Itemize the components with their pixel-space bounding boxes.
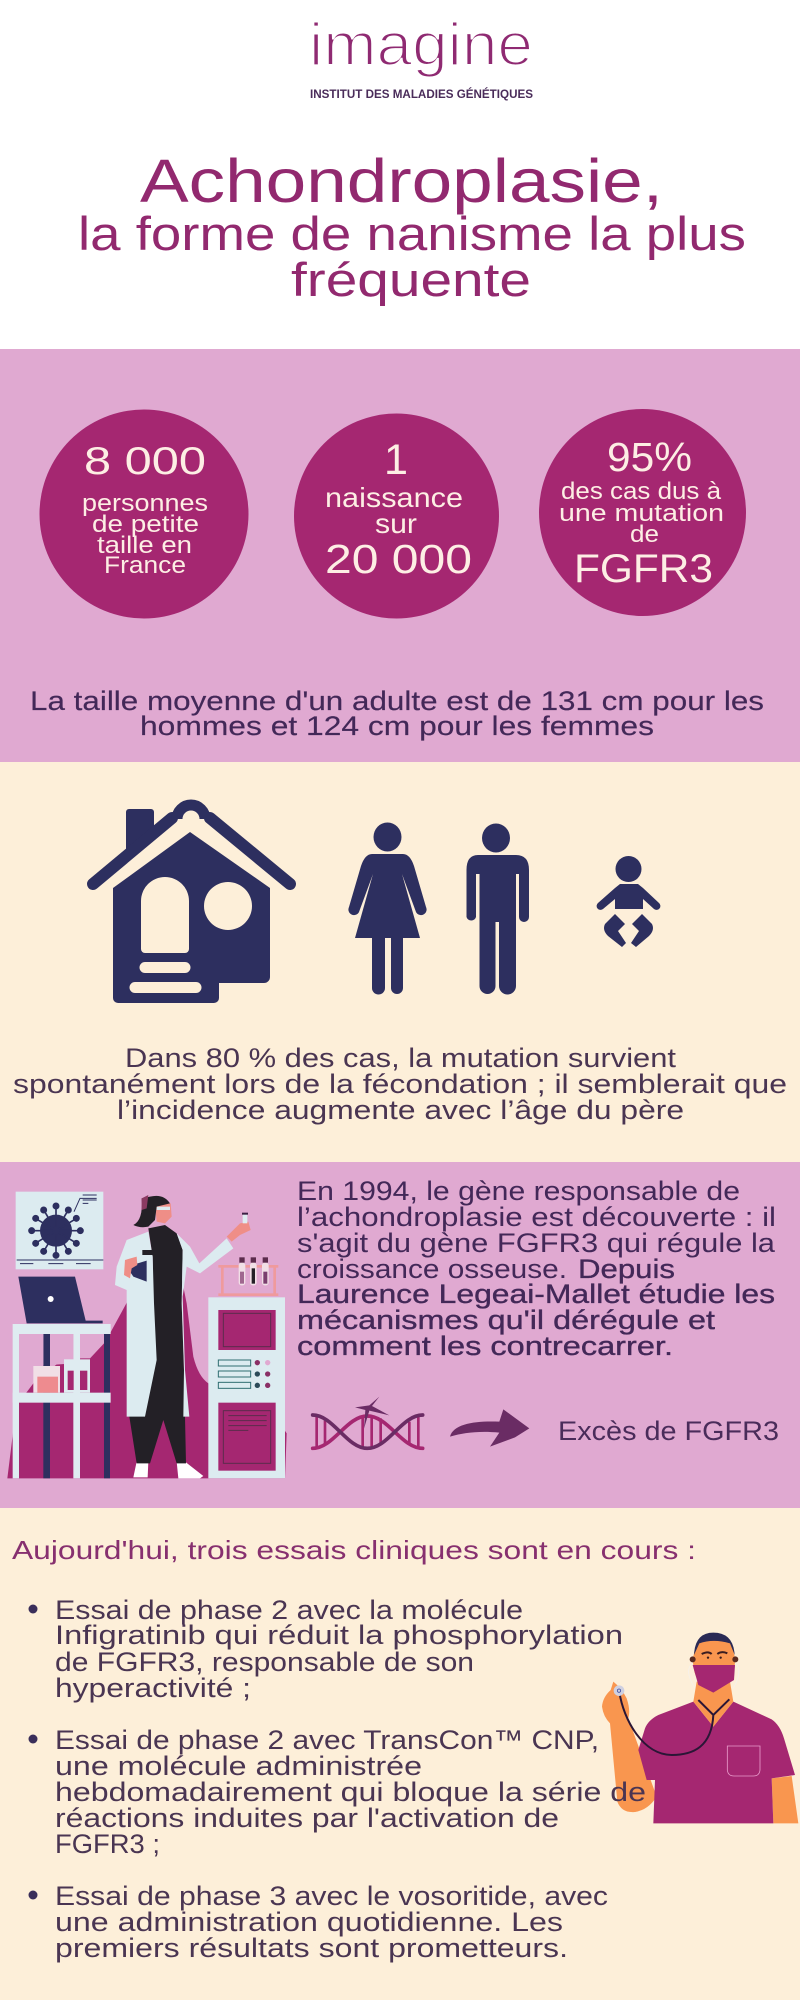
- list item: TransCon CNP trial: [28, 1725, 646, 1859]
- arrow: [450, 1409, 529, 1447]
- list item: Infigratinib trial: Essai de phase 2 avec la molécule: [55, 1595, 523, 1625]
- panel: spontaneous mutation: [0, 762, 800, 1162]
- stat circle: 1 naissance sur 20 000: sur: [375, 508, 417, 539]
- text: FGFR3 discovery: croissance osseuse.: [297, 1254, 567, 1284]
- text: mutation explanation: l’incidence augmente avec l’âge du père: [117, 1095, 684, 1125]
- stat circle: 1 naissance sur 20 000: naissance: [325, 482, 463, 513]
- list item: Infigratinib trial: hyperactivité ;: [55, 1673, 251, 1703]
- stat circle: 1 naissance sur 20 000: 1: [384, 436, 408, 484]
- list item: TransCon CNP trial: réactions induites par l'activation de: [55, 1803, 559, 1833]
- list item: vosoritide trial: une administration quotidienne. Les: [55, 1907, 563, 1937]
- text: FGFR3 discovery: l’achondroplasie est découverte : il: [297, 1202, 776, 1232]
- text: FGFR3 discovery: Laurence Legeai-Mallet étudie les: [297, 1279, 775, 1309]
- text: FGFR3 discovery: En 1994, le gène responsable de: [297, 1176, 740, 1206]
- logo: imagine: [309, 11, 533, 101]
- heading: clinical trials: Aujourd'hui, trois essais cliniques sont en cours :: [12, 1535, 696, 1565]
- text: mutation explanation: spontanément lors de la fécondation ; il semblerait que: [13, 1069, 787, 1099]
- icon: man: [466, 824, 529, 994]
- text: FGFR3 discovery: comment les contrecarrer.: [297, 1331, 673, 1361]
- text: FGFR3 discovery: mécanismes qu'il dérégule et: [297, 1305, 716, 1335]
- text: FGFR3 discovery: [297, 1176, 776, 1361]
- title: Achondroplasie,: [140, 147, 663, 215]
- icon: DNA with mutation: [313, 1397, 423, 1448]
- list item: TransCon CNP trial: FGFR3 ;: [55, 1829, 160, 1859]
- panel: header: [0, 0, 800, 349]
- stat circle: 95% FGFR3: une mutation: [559, 500, 724, 527]
- text: FGFR3 discovery: s'agit du gène FGFR3 qui régule la: [297, 1228, 776, 1258]
- stat circle: 95% FGFR3: 95%: [607, 434, 692, 480]
- list item: Infigratinib trial: de FGFR3, responsable de son: [55, 1647, 474, 1677]
- panel: clinical trials: [0, 1508, 800, 2000]
- stat circle: 95% FGFR3: [539, 409, 746, 616]
- list item: Infigratinib trial: Infigratinib qui réduit la phosphorylation: [55, 1620, 623, 1650]
- text: average adult height: La taille moyenne d'un adulte est de 131 cm pour les: [30, 686, 764, 716]
- icon: house: [93, 805, 290, 1003]
- label: excess of FGFR3: Excès de FGFR3: [558, 1416, 779, 1446]
- list item: TransCon CNP trial: une molécule administrée: [55, 1751, 422, 1781]
- stat circle: 95% FGFR3: des cas dus à: [561, 478, 722, 505]
- list item: Infigratinib trial: [28, 1595, 623, 1703]
- stat circle: 1 naissance sur 20 000: [294, 414, 499, 618]
- panel: research: [0, 1162, 800, 1508]
- list item: vosoritide trial: premiers résultats sont prometteurs.: [55, 1933, 568, 1963]
- list item: TransCon CNP trial: hebdomadairement qui bloque la série de: [55, 1777, 646, 1807]
- icon: woman: [348, 822, 427, 994]
- text: mutation explanation: Dans 80 % des cas, la mutation survient: [125, 1043, 677, 1073]
- list item: vosoritide trial: Essai de phase 3 avec le vosoritide, avec: [55, 1881, 608, 1911]
- stat circle: 95% FGFR3: FGFR3: [574, 547, 713, 591]
- stat circle: 8 000 personnes: personnes: [82, 490, 208, 517]
- illustration: doctor with stethoscope: [602, 1633, 798, 1823]
- text: FGFR3 discovery: Depuis: [578, 1254, 675, 1284]
- stat circle: 8 000 personnes: taille en: [97, 532, 192, 559]
- stat circle: 1 naissance sur 20 000: 20 000: [325, 536, 472, 582]
- stat circle: 8 000 personnes: 8 000: [84, 440, 206, 483]
- text: average adult height: hommes et 124 cm pour les femmes: [140, 711, 654, 741]
- text: average adult height: [30, 686, 764, 741]
- list item: vosoritide trial: [28, 1881, 608, 1963]
- stat circle: 8 000 personnes: [40, 410, 248, 618]
- stat circle: 95% FGFR3: de: [630, 521, 659, 548]
- panel: key figures: [0, 349, 800, 762]
- logo: imagine: INSTITUT DES MALADIES GÉNÉTIQUES: [310, 88, 533, 101]
- title: [78, 147, 746, 306]
- stat circle: 8 000 personnes: de petite: [92, 511, 199, 538]
- illustration: scientist in laboratory: [7, 1192, 287, 1478]
- title: fréquente: [291, 253, 531, 306]
- list item: TransCon CNP trial: Essai de phase 2 avec TransCon™ CNP,: [55, 1725, 599, 1755]
- icon: baby: [597, 856, 660, 947]
- logo: imagine: imagine: [309, 11, 533, 78]
- text: mutation explanation: [13, 1043, 787, 1125]
- title: la forme de nanisme la plus: [78, 207, 746, 260]
- stat circle: 8 000 personnes: France: [104, 552, 186, 579]
